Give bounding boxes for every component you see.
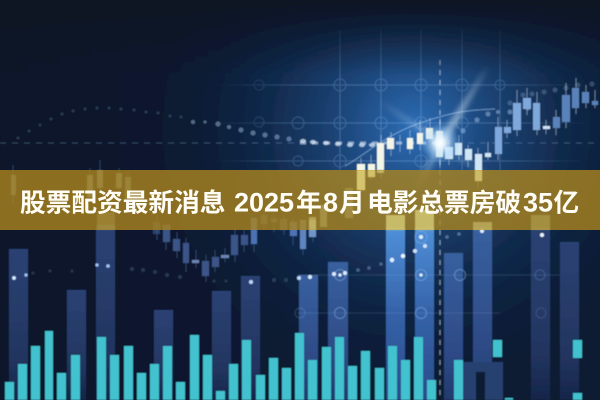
title text: 股票配资最新消息 (20, 188, 226, 218)
candlesticks: upper (357, 78, 598, 192)
dotted trend curves (12, 82, 594, 284)
title text: 月 (339, 190, 365, 218)
blue background bars (9, 225, 579, 400)
title text: 35 (523, 188, 553, 218)
rising trend line (345, 109, 495, 166)
glints on nodes (12, 235, 423, 280)
title text: 2025 (234, 188, 294, 218)
candlesticks: lower left (11, 160, 316, 282)
title text: 年 (296, 188, 322, 218)
teal bars (5, 331, 582, 400)
title text: 亿 (554, 188, 579, 218)
highlights showing through banner (11, 170, 550, 230)
grid with nodes (200, 30, 600, 170)
lower grid nodes over bars (295, 231, 560, 318)
title text: 8 (323, 188, 338, 218)
lens flare (378, 66, 510, 198)
top and edge darkening (0, 0, 600, 75)
title banner (0, 170, 600, 230)
title text: 电影总票房破 (367, 188, 521, 218)
